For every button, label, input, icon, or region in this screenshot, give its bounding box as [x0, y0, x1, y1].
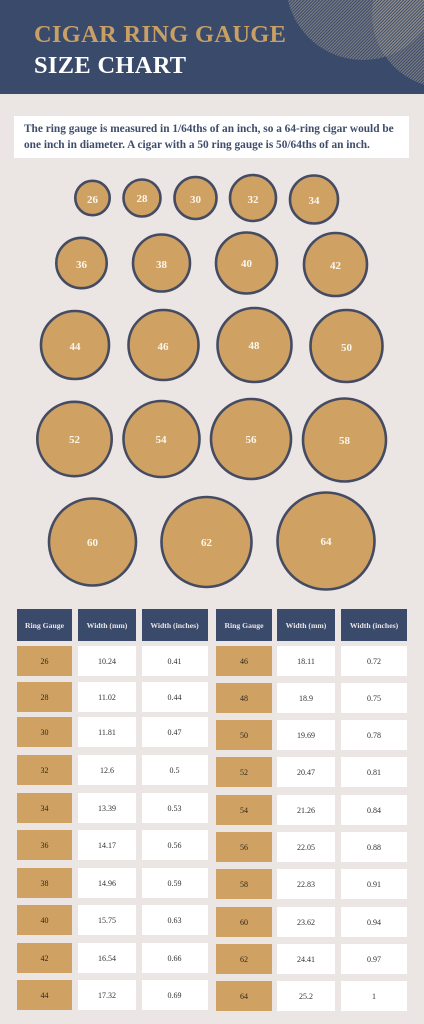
size table: 54 — [240, 806, 248, 814]
table headers — [17, 609, 407, 641]
size table: 15.75 — [98, 916, 116, 924]
ring gauge circles: 58 — [339, 435, 350, 447]
intro text box: one inch in diameter. A cigar with a 50 ring gauge is 50/64ths of an inch. — [24, 138, 370, 150]
size table: 62 — [240, 954, 248, 964]
ring gauge circles: 38 — [156, 259, 168, 271]
size table: 30 — [40, 728, 48, 736]
size table: 34 — [40, 804, 48, 812]
size table: 38 — [40, 878, 48, 888]
ring gauge circles: 26 — [87, 194, 98, 206]
size table: 0.94 — [367, 918, 381, 926]
ring gauge circles: 30 — [190, 194, 202, 206]
size table: 0.69 — [168, 990, 182, 1000]
size table: 14.96 — [98, 878, 116, 888]
size table: 16.54 — [98, 954, 116, 962]
size table: 32 — [40, 766, 48, 774]
size table: 0.44 — [168, 692, 182, 702]
size table: 0.78 — [367, 730, 381, 740]
size table: 26 — [40, 656, 48, 666]
size table: 0.5 — [170, 766, 180, 774]
ring gauge circles: 64 — [320, 536, 332, 548]
intro text box — [14, 116, 409, 158]
table headers: Width (inches) — [350, 620, 398, 630]
size table: 22.05 — [297, 842, 315, 852]
ring gauge circles: 56 — [246, 434, 257, 446]
table headers: Width (inches) — [150, 620, 199, 630]
size table: 0.56 — [168, 840, 182, 850]
size table: 10.24 — [98, 656, 116, 666]
size table: 0.84 — [367, 806, 381, 814]
size table: 50 — [240, 730, 248, 740]
ring gauge circles: 54 — [156, 434, 167, 446]
ring gauge circles: 60 — [87, 537, 98, 549]
ring gauge circles: 32 — [248, 194, 259, 206]
size table: 0.53 — [168, 804, 182, 812]
size table: 0.97 — [367, 954, 381, 964]
header banner — [0, 0, 424, 94]
size table: 18.9 — [299, 694, 313, 702]
size table: 40 — [40, 916, 48, 924]
size table: 25.2 — [299, 992, 313, 1000]
size table: 0.41 — [168, 656, 182, 666]
size table: 20.47 — [297, 768, 315, 776]
size table: 11.81 — [98, 728, 116, 736]
size table: 0.75 — [367, 694, 381, 702]
size table: 23.62 — [297, 918, 315, 926]
size table: 11.02 — [98, 692, 116, 702]
table headers: Width (mm) — [87, 620, 127, 630]
size table: 36 — [40, 840, 48, 850]
size table: 0.72 — [367, 656, 381, 666]
table headers: Width (mm) — [286, 620, 326, 630]
title: SIZE CHART — [34, 52, 186, 79]
ring gauge circles: 34 — [308, 195, 320, 207]
size table: 0.91 — [367, 880, 381, 888]
size table: 0.88 — [367, 842, 381, 852]
intro text box: The ring gauge is measured in 1/64ths of an inch, so a 64-ring cigar would be — [24, 123, 394, 135]
size table: 12.6 — [100, 766, 114, 774]
title: CIGAR RING GAUGE — [34, 21, 286, 48]
hatched decorative circles — [288, 0, 424, 84]
ring gauge circles: 44 — [70, 341, 81, 353]
size table: 44 — [40, 990, 48, 1000]
size table: 60 — [240, 918, 248, 926]
size table: 1 — [372, 992, 376, 1000]
size table: 22.83 — [297, 880, 315, 888]
ring gauge circles: 52 — [69, 434, 80, 446]
size table: 0.59 — [168, 878, 182, 888]
ring gauge circles — [36, 174, 388, 591]
table headers: Ring Gauge — [25, 620, 64, 630]
size table: 19.69 — [297, 730, 315, 740]
size table: 46 — [240, 656, 248, 666]
ring gauge circles: 42 — [330, 260, 342, 272]
size table: 64 — [240, 992, 248, 1000]
size table: 0.63 — [168, 916, 182, 924]
ring gauge circles: 48 — [248, 340, 260, 352]
size table: 28 — [40, 692, 48, 702]
size table: 0.66 — [168, 954, 182, 962]
size table: 14.17 — [98, 840, 116, 850]
size table: 42 — [40, 954, 48, 962]
ring gauge circles: 50 — [341, 342, 352, 354]
size table: 0.81 — [367, 768, 381, 776]
size table: 24.41 — [297, 954, 315, 964]
size table: 17.32 — [98, 990, 116, 1000]
ring gauge circles: 28 — [136, 193, 148, 205]
ring gauge circles: 40 — [241, 258, 252, 270]
ring gauge circles: 62 — [201, 537, 212, 549]
size table: 52 — [240, 768, 248, 776]
size table: 56 — [240, 842, 248, 852]
title — [34, 21, 286, 79]
size table: 48 — [240, 694, 248, 702]
ring gauge circles: 46 — [158, 341, 169, 353]
size table: 0.47 — [168, 728, 182, 736]
size table: 13.39 — [98, 804, 116, 812]
size table: 21.26 — [297, 806, 315, 814]
ring gauge circles: 36 — [76, 259, 88, 271]
table headers: Ring Gauge — [224, 620, 264, 630]
size table: 18.11 — [297, 656, 315, 666]
size table: 58 — [240, 880, 248, 888]
